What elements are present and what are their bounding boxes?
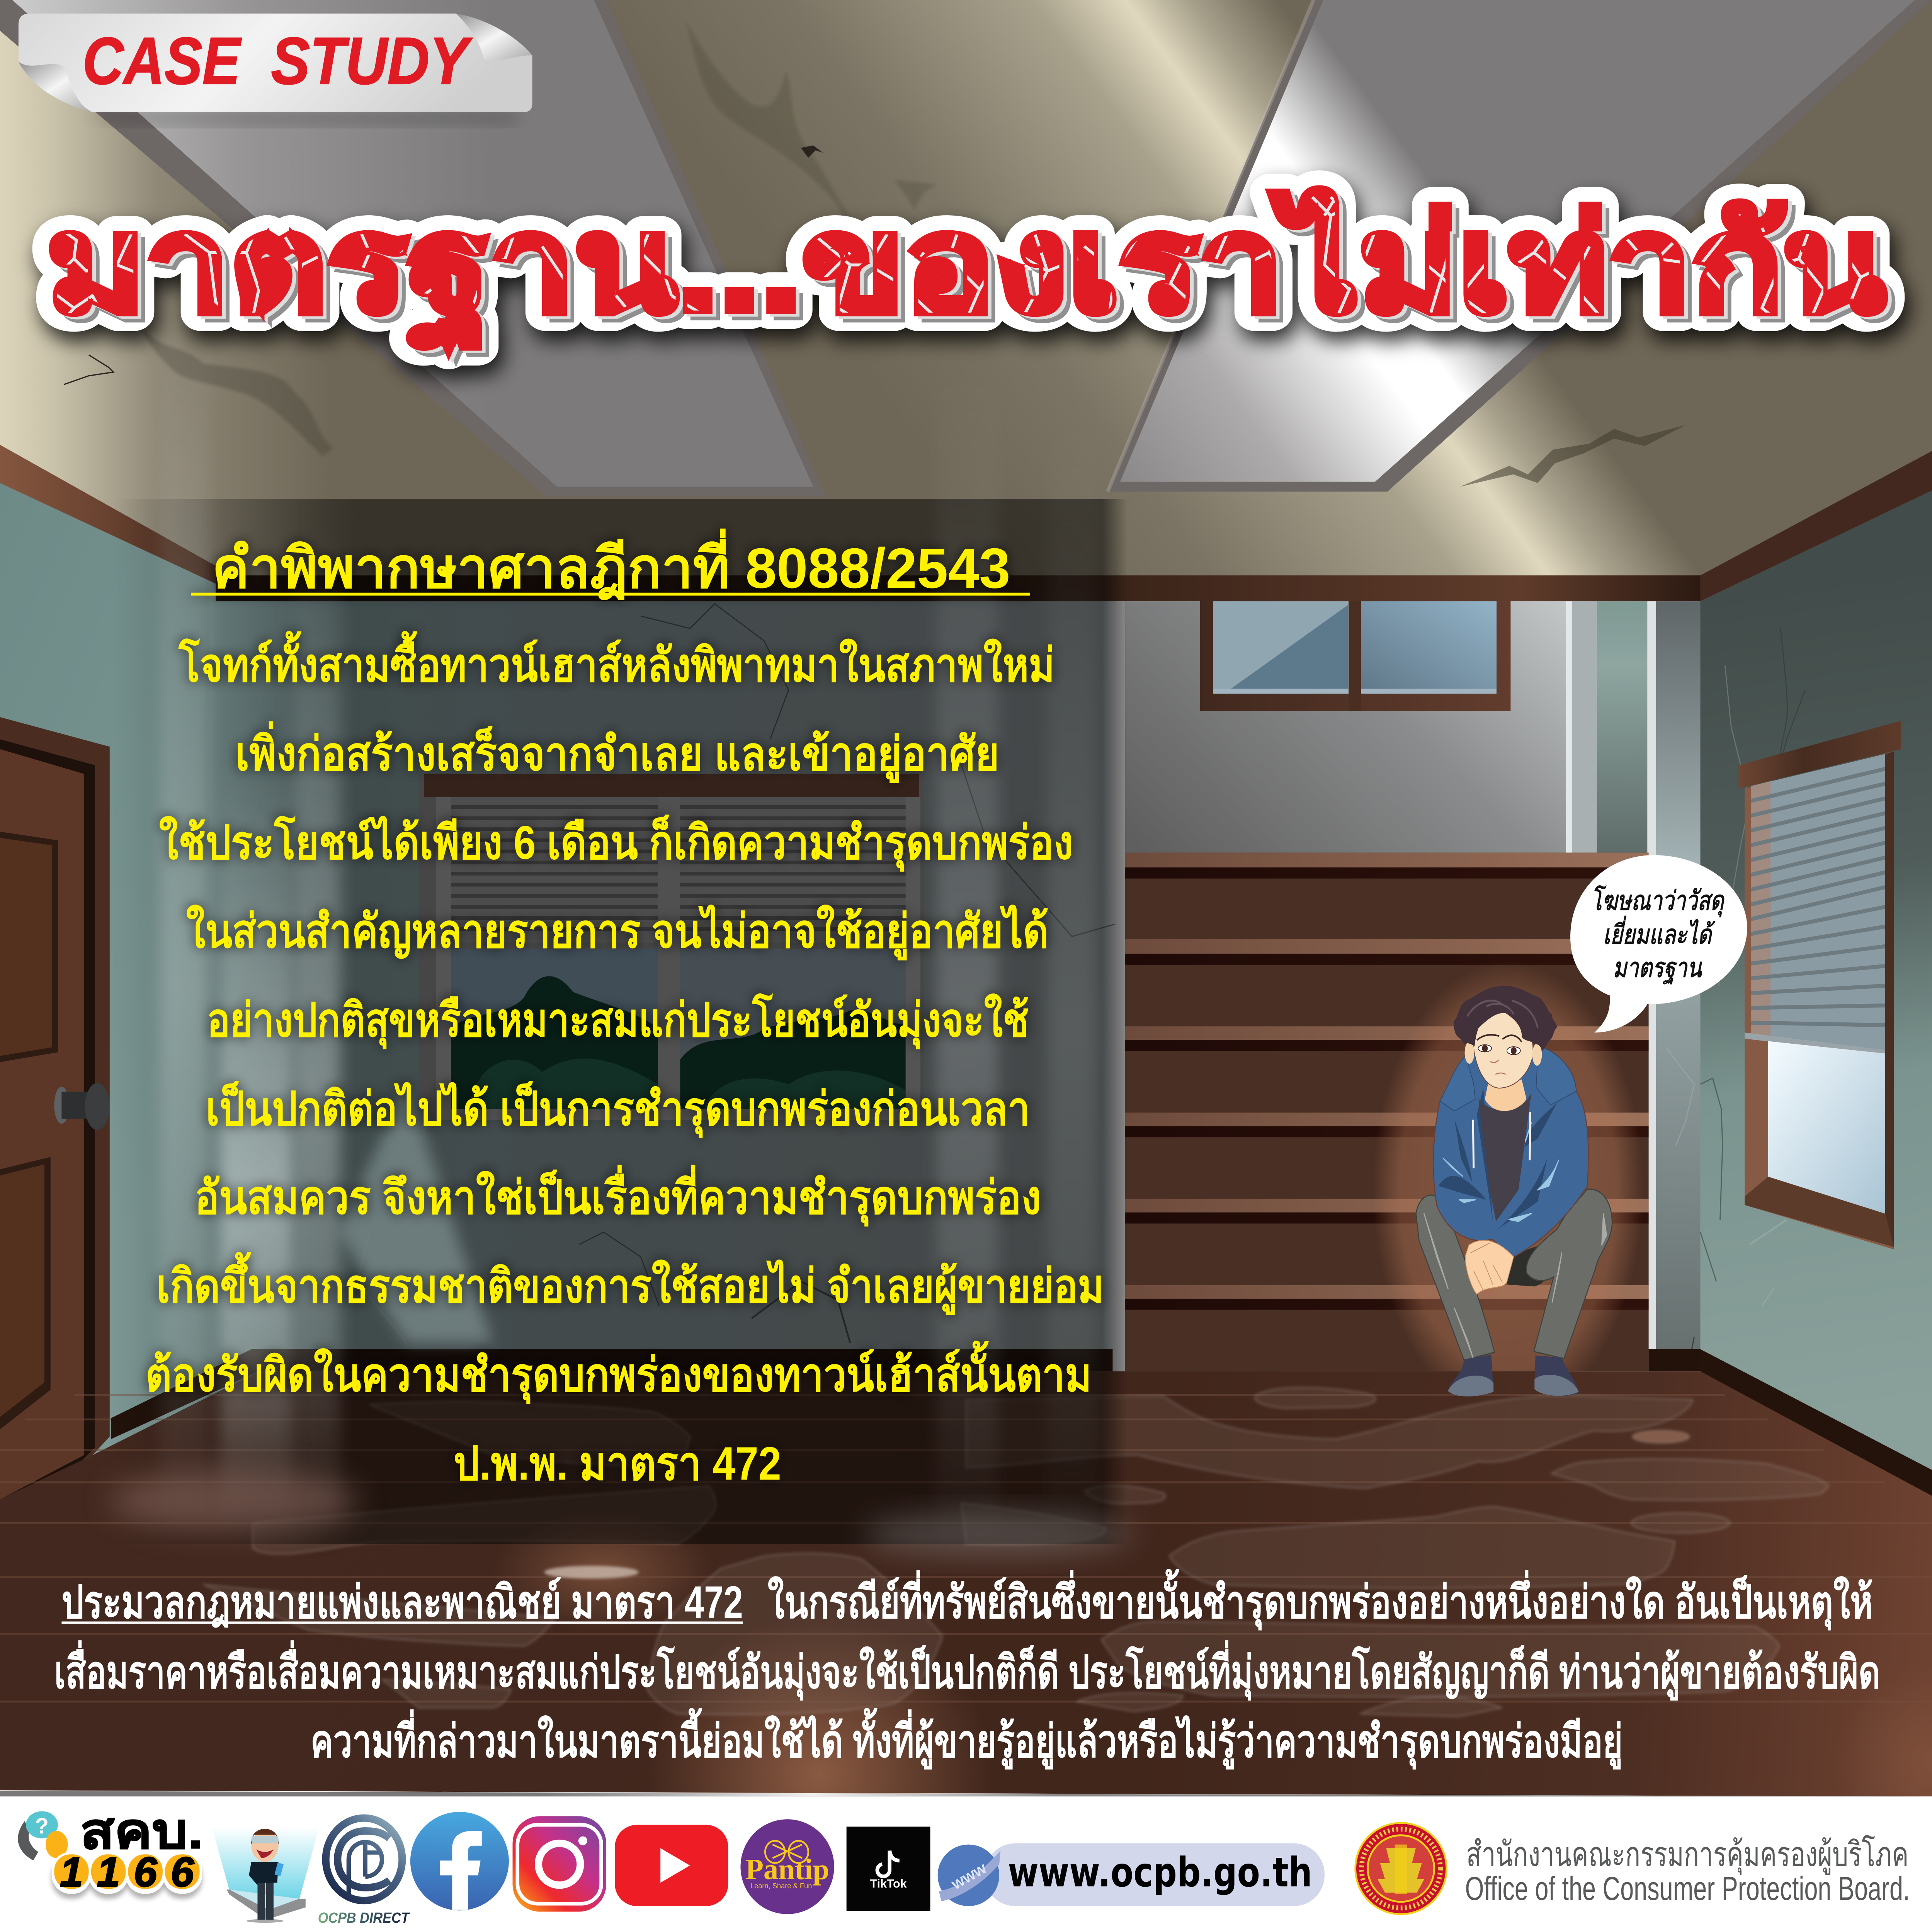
case paragraph lines: ใช้ประโยชน์ได้เพียง 6 เดือน ก็เกิดความชำรุดบกพร่อง xyxy=(159,815,1073,872)
back wall right part xyxy=(1125,601,1701,1378)
case paragraph lines: ในส่วนสำคัญหลายรายการ จนไม่อาจใช้อยู่อาศัยได้ xyxy=(186,905,1049,961)
walls and room structure xyxy=(0,445,1932,1932)
ceiling panel: right xyxy=(1108,0,1932,492)
wall cracks xyxy=(357,604,1891,1368)
logo: hotline 1166 xyxy=(18,1804,203,1899)
case paragraph lines: โจทก์ทั้งสามซื้อทาวน์เฮาส์หลังพิพาทมาในสภาพใหม่ xyxy=(179,631,1055,691)
legal text block xyxy=(54,1569,1880,1770)
main title xyxy=(47,185,1893,358)
hotline digits xyxy=(52,1849,202,1899)
footer xyxy=(0,1791,1932,1932)
hotline digits: 6 xyxy=(171,1849,194,1895)
face xyxy=(1473,1012,1533,1088)
hair xyxy=(1454,986,1557,1051)
case paragraph lines: อันสมควร จึงหาใช่เป็นเรื่องที่ความชำรุดบกพร่อง xyxy=(195,1165,1041,1227)
right window xyxy=(1738,721,1901,1249)
logo: pantip: Pantip xyxy=(745,1853,829,1886)
case heading: คำพิพากษาศาลฎีกาที่ 8088/2543 xyxy=(212,528,1010,600)
case paragraph lines: เกิดขึ้นจากธรรมชาติของการใช้สอยไม่ จำเลยผู้ขายย่อม xyxy=(156,1252,1104,1316)
icon: phone chat: ? xyxy=(35,1814,49,1838)
case paragraph lines: ป.พ.พ. มาตรา 472 xyxy=(453,1437,781,1490)
logo: government seal xyxy=(1355,1823,1447,1914)
bookshelf / stairs xyxy=(1125,853,1649,1417)
case paragraph lines xyxy=(145,631,1104,1490)
ceiling cracks xyxy=(64,22,1685,487)
case paragraph lines: อย่างปกติสุขหรือเหมาะสมแก่ประโยชน์อันมุ่งจะใช้ xyxy=(207,993,1029,1049)
eyes xyxy=(1477,1035,1522,1054)
logo: tiktok xyxy=(847,1827,930,1911)
neck xyxy=(1485,1080,1527,1111)
sticker heading xyxy=(83,24,473,98)
logo: pantip xyxy=(740,1819,834,1914)
hoodie xyxy=(1433,1048,1588,1258)
puddles xyxy=(203,1388,1828,1716)
case paragraph lines: เป็นปกติต่อไปได้ เป็นการชำรุดบกพร่องก่อนเวลา xyxy=(206,1080,1030,1138)
drawstrings xyxy=(1473,1112,1531,1168)
icon: youtube xyxy=(615,1825,728,1906)
t-shirt xyxy=(1478,1093,1531,1221)
right leg xyxy=(1526,1189,1612,1359)
ceiling moulding back xyxy=(216,575,1701,601)
icon: globe: www xyxy=(948,1859,990,1893)
hotline digits: 6 xyxy=(134,1849,157,1895)
sticker label: case study xyxy=(19,14,532,126)
water leak streaks xyxy=(111,320,1134,1556)
title white outline with shadow: มาตรฐาน...ของเราไม่เท่ากัน xyxy=(47,188,1886,352)
title cracks clipped to letters xyxy=(49,185,1885,323)
logo: tiktok: TikTok xyxy=(870,1878,907,1890)
sticker heading: CASE xyxy=(83,24,242,98)
baseboards xyxy=(111,1349,1932,1496)
hotline digits: 1 xyxy=(97,1849,120,1895)
left shoe xyxy=(1448,1355,1493,1396)
icon: instagram xyxy=(513,1816,606,1912)
title light edge: มาตรฐาน...ของเราไม่เท่ากัน xyxy=(51,190,1889,355)
left wall xyxy=(0,481,370,1626)
mouth and nose xyxy=(1490,1060,1506,1074)
bubble text: มาตรฐาน xyxy=(1613,952,1702,985)
hands xyxy=(1465,1240,1514,1294)
floor xyxy=(0,1349,1932,1932)
ceiling moulding left xyxy=(0,445,222,587)
ceiling panel: left xyxy=(0,0,825,497)
icon: phone chat xyxy=(18,1811,68,1861)
case paragraph lines: ต้องรับผิดในความชำรุดบกพร่องของทาวน์เฮ้าส์นั้นตาม xyxy=(145,1341,1092,1404)
illustration: mascot on platform xyxy=(212,1827,319,1923)
title red fill: มาตรฐาน...ของเราไม่เท่ากัน xyxy=(47,188,1886,352)
bubble text xyxy=(1591,885,1725,985)
hotline heading: สคบ. xyxy=(80,1804,203,1859)
background: ceiling xyxy=(0,0,1932,579)
character: sad man on steps xyxy=(1416,986,1612,1396)
icon: facebook xyxy=(410,1812,509,1910)
ceiling moulding right xyxy=(1701,451,1932,601)
left leg xyxy=(1416,1195,1495,1360)
label: OCPB direct: OCPB DIRECT xyxy=(318,1910,410,1926)
bubble text: โฆษณาว่าวัสดุ xyxy=(1591,885,1725,917)
hotline digits: 1 xyxy=(60,1849,83,1895)
logo: OCPB xyxy=(326,1818,402,1901)
speech bubble xyxy=(1570,855,1747,1032)
organisation name xyxy=(1465,1835,1910,1907)
legal citation underlined: ประมวลกฎหมายแพ่งและพาณิชย์ มาตรา 472 xyxy=(61,1577,743,1628)
back wall left part with centre window xyxy=(209,575,1128,1390)
back wall small window xyxy=(1200,599,1510,711)
dark backing overlay behind case text xyxy=(111,499,1128,1544)
website address: www.ocpb.go.th xyxy=(1008,1849,1312,1896)
door xyxy=(0,717,110,1500)
icon: globe xyxy=(938,1845,1000,1906)
inner trouser shadow xyxy=(1506,1241,1552,1286)
right shoe xyxy=(1534,1355,1579,1396)
bubble text: เยี่ยมและได้ xyxy=(1603,916,1715,950)
hoodie shading xyxy=(1439,1087,1557,1229)
hood collar xyxy=(1440,1048,1576,1111)
sticker heading: STUDY xyxy=(271,24,473,98)
title grey extrusion: มาตรฐาน...ของเราไม่เท่ากัน xyxy=(54,194,1893,358)
case paragraph lines: เพิ่งก่อสร้างเสร็จจากจำเลย และเข้าอยู่อาศัย xyxy=(235,721,999,783)
website pill xyxy=(938,1843,1325,1906)
icon: door knob xyxy=(54,1083,110,1130)
case text block xyxy=(145,528,1104,1490)
right wall xyxy=(1701,490,1932,1473)
logo: pantip: Learn, Share & Fun xyxy=(750,1882,812,1890)
